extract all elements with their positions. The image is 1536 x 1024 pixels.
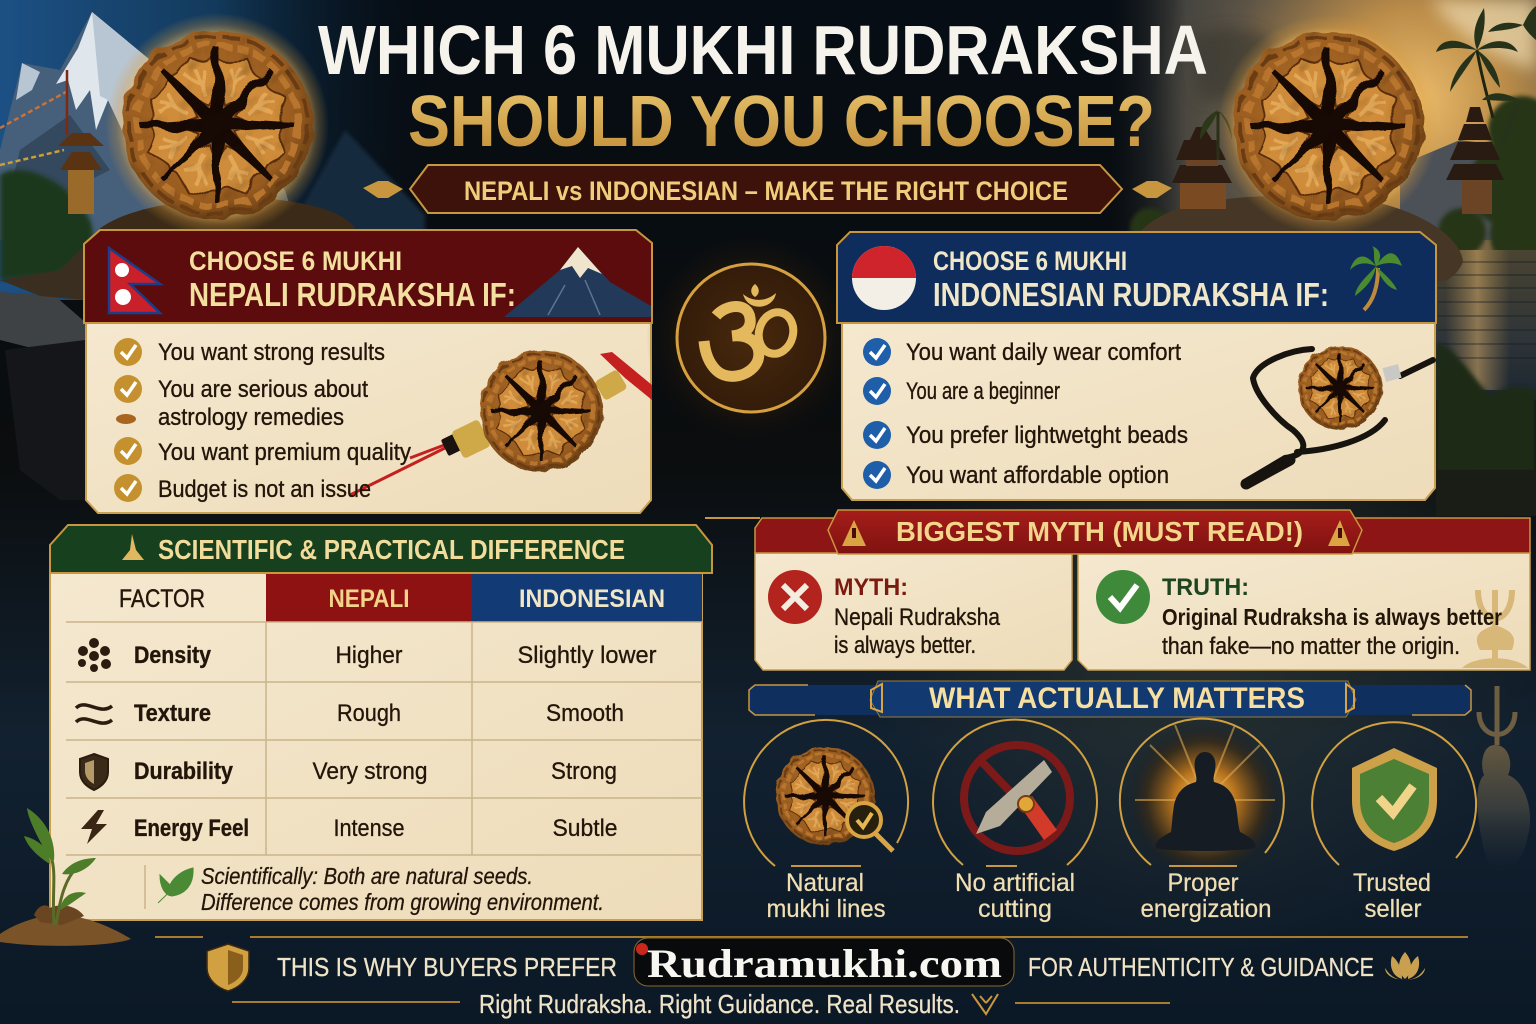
- what matters: no artificial cutting: cutting: [978, 895, 1052, 923]
- footer: FOR AUTHENTICITY & GUIDANCE: [1028, 952, 1374, 982]
- row: durability: Durability: [134, 758, 234, 785]
- om emblem: [646, 233, 856, 443]
- right rudraksha bead: [1218, 15, 1438, 235]
- checklist: You are serious about: [158, 376, 368, 403]
- what matters: no artificial cutting: No artificial: [955, 869, 1075, 897]
- subtitle banner: NEPALI vs INDONESIAN – MAKE THE RIGHT CHOICE: [464, 176, 1068, 206]
- truth card: TRUTH:: [1162, 574, 1249, 601]
- checklist: [114, 338, 411, 503]
- pagoda left: [1172, 110, 1232, 209]
- icon: Indonesia flag: [852, 246, 916, 310]
- row: texture: Rough: [337, 700, 401, 727]
- panel header: [84, 230, 652, 323]
- bead with black cord: [1246, 346, 1433, 484]
- row: durability: Very strong: [312, 758, 428, 785]
- icon: lotus: [1385, 952, 1425, 980]
- table heading: [50, 525, 712, 573]
- row: texture: Smooth: [546, 700, 624, 727]
- panel: scientific difference table: [50, 525, 712, 920]
- panel heading: [189, 246, 516, 313]
- right scene: sunset, palms, pagodas: [1110, 0, 1536, 516]
- what matters: proper energization: energization: [1140, 895, 1272, 923]
- checklist: Budget is not an issue: [158, 476, 371, 503]
- table heading: SCIENTIFIC & PRACTICAL DIFFERENCE: [158, 534, 625, 565]
- panel: biggest myth: [705, 510, 1530, 670]
- icon: palm tree: [1350, 246, 1402, 310]
- note: scientifically: [145, 863, 604, 915]
- left rudraksha bead: [105, 13, 329, 237]
- myth card: is always better.: [834, 632, 976, 659]
- footer: THIS IS WHY BUYERS PREFER: [277, 952, 617, 982]
- panel header: [837, 232, 1436, 323]
- myth card: [755, 553, 1072, 670]
- row: energy feel: Energy Feel: [134, 815, 249, 842]
- column headers: INDONESIAN: [519, 585, 665, 613]
- checklist: You want affordable option: [906, 462, 1169, 489]
- note: scientifically: Difference comes from growing environment.: [201, 889, 604, 915]
- panel body: [86, 323, 651, 513]
- logo: Rudramukhi.com: [647, 941, 1002, 986]
- checklist: You want strong results: [158, 339, 385, 366]
- row: energy feel: Intense: [334, 815, 404, 842]
- what matters: proper energization: Proper: [1168, 869, 1238, 897]
- icon: footer flourish: [972, 994, 998, 1014]
- title: [318, 11, 1208, 162]
- what matters: trusted seller: [1312, 722, 1476, 923]
- title: SHOULD YOU CHOOSE?: [408, 82, 1155, 162]
- row: texture: Texture: [134, 700, 211, 727]
- panel body: [842, 323, 1435, 500]
- table body: [50, 573, 702, 920]
- icon: footer shield: [207, 944, 249, 991]
- row: density: Density: [134, 642, 212, 669]
- water: [1436, 250, 1536, 400]
- palms: [1477, 50, 1493, 118]
- what matters: natural mukhi lines: [744, 720, 908, 923]
- checklist: [863, 338, 1188, 489]
- bead with red cord: [350, 350, 652, 495]
- myth heading: [755, 510, 1530, 554]
- note: scientifically: Scientifically: Both are natural seeds.: [201, 863, 533, 889]
- panel heading: NEPALI RUDRAKSHA IF:: [189, 276, 516, 313]
- panel heading: INDONESIAN RUDRAKSHA IF:: [933, 276, 1329, 313]
- row: energy feel: Subtle: [552, 815, 618, 842]
- checklist: You want daily wear comfort: [906, 339, 1181, 366]
- panel heading: [933, 246, 1329, 313]
- column headers: NEPALI: [328, 585, 410, 613]
- checklist: You want premium quality: [158, 439, 411, 466]
- row: durability: Strong: [551, 758, 617, 785]
- pagoda right: [1446, 107, 1504, 214]
- row: energy feel: [81, 810, 618, 844]
- panel: Nepali: [84, 230, 652, 513]
- myth heading: BIGGEST MYTH (MUST READ!): [896, 516, 1303, 547]
- truth card: than fake—no matter the origin.: [1162, 633, 1460, 660]
- what matters: trusted seller: Trusted: [1353, 869, 1431, 897]
- subtitle banner: [363, 165, 1172, 213]
- left scene: sky and Himalaya: [0, 0, 430, 500]
- panel heading: CHOOSE 6 MUKHI: [189, 246, 402, 276]
- what matters: no artificial cutting: [933, 720, 1097, 923]
- checklist: astrology remedies: [158, 404, 344, 431]
- footer: Right Rudraksha. Right Guidance. Real Results.: [479, 989, 960, 1019]
- myth card: Nepali Rudraksha: [834, 604, 1001, 631]
- row: density: [78, 638, 657, 672]
- row: density: Higher: [336, 642, 403, 669]
- what actually matters banner: [749, 681, 1471, 717]
- what matters: trusted seller: seller: [1364, 895, 1422, 923]
- what matters: natural mukhi lines: Natural: [786, 869, 864, 897]
- what actually matters banner: WHAT ACTUALLY MATTERS: [929, 682, 1305, 715]
- row: density: Slightly lower: [518, 642, 657, 669]
- column headers: FACTOR: [119, 585, 205, 613]
- panel heading: CHOOSE 6 MUKHI: [933, 246, 1127, 276]
- checklist: You prefer lightwetght beads: [906, 422, 1188, 449]
- truth card: [1078, 553, 1530, 670]
- lower right trident statue: [1477, 686, 1530, 871]
- foliage: [1130, 96, 1536, 275]
- panel: Indonesian: [837, 232, 1436, 500]
- icon: Nepal flag: [109, 248, 160, 313]
- what matters: proper energization: [1120, 719, 1284, 923]
- footer: [155, 937, 1468, 1019]
- column headers: [119, 574, 702, 622]
- what matters: natural mukhi lines: mukhi lines: [766, 895, 886, 923]
- myth card: MYTH:: [834, 574, 908, 601]
- icon: mountain: [504, 247, 651, 317]
- title: WHICH 6 MUKHI RUDRAKSHA: [318, 11, 1208, 89]
- seedling on soil: [0, 808, 131, 946]
- row: durability: [80, 754, 617, 790]
- checklist: You are a beginner: [906, 378, 1060, 405]
- row: texture: [76, 700, 624, 727]
